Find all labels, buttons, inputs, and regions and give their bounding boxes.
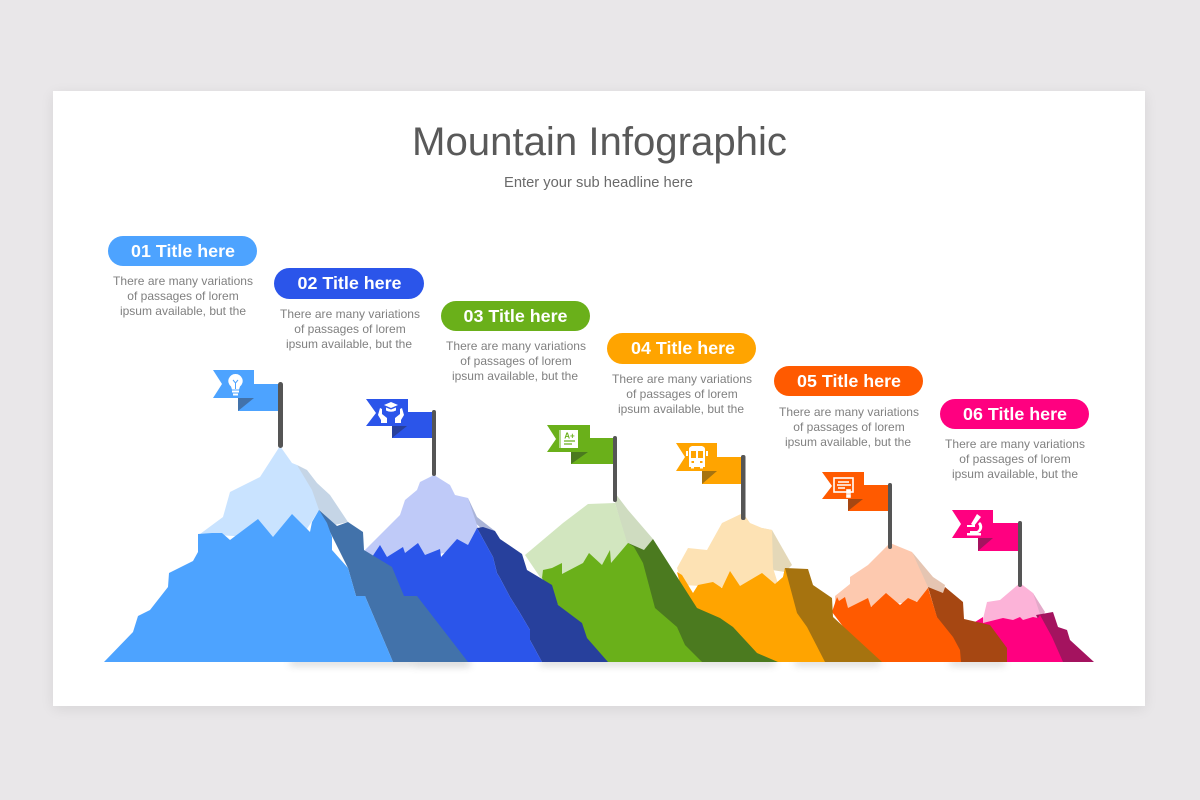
- step 4 label: of passages of lorem: [626, 387, 738, 401]
- step 3 label: ipsum available, but the: [452, 369, 578, 383]
- step 2 label: There are many variations: [280, 307, 420, 321]
- step 1 label: 01 Title here: [131, 241, 235, 261]
- step 1 label: There are many variations: [113, 274, 253, 288]
- mountain 6: pink: [950, 510, 1094, 662]
- icon: light bulb: [228, 374, 243, 396]
- step 1 label: [108, 236, 257, 318]
- title: Mountain Infographic: [412, 120, 787, 164]
- step 2 label: of passages of lorem: [294, 322, 406, 336]
- step 3 label: 03 Title here: [464, 306, 568, 326]
- step 6 label: There are many variations: [945, 437, 1085, 451]
- step 4 label: 04 Title here: [631, 338, 735, 358]
- step 5 label: There are many variations: [779, 405, 919, 419]
- step 1 label: ipsum available, but the: [120, 304, 246, 318]
- step 6 label: [940, 399, 1089, 481]
- flag 4 with icon: [676, 443, 746, 520]
- step 1 label: of passages of lorem: [127, 289, 239, 303]
- icon: certificate: [834, 478, 853, 497]
- slide card: [53, 91, 1145, 706]
- step 4 label: There are many variations: [612, 372, 752, 386]
- flag 2 with icon: [366, 399, 436, 476]
- step 6 label: 06 Title here: [963, 404, 1067, 424]
- flag 1 with icon: [213, 370, 283, 448]
- mountain 2: royal blue: [365, 399, 608, 662]
- icon: A+ document: A+: [564, 432, 575, 440]
- step 4 label: [607, 333, 756, 416]
- mountain 1: light blue: [104, 370, 468, 662]
- icon: hands holding graduation cap: [378, 402, 404, 423]
- icon: microscope: [967, 514, 982, 536]
- step 5 label: of passages of lorem: [793, 420, 905, 434]
- subtitle: Enter your sub headline here: [504, 175, 693, 191]
- icon: bus: [686, 446, 708, 468]
- step 5 label: ipsum available, but the: [785, 435, 911, 449]
- step 6 label: ipsum available, but the: [952, 467, 1078, 481]
- mountain 5: red-orange: [822, 472, 1007, 662]
- step 3 label: There are many variations: [446, 339, 586, 353]
- flag 3 with icon: [547, 425, 617, 502]
- step 6 label: of passages of lorem: [959, 452, 1071, 466]
- step 2 label: 02 Title here: [298, 273, 402, 293]
- step 3 label: of passages of lorem: [460, 354, 572, 368]
- step 5 label: [774, 366, 923, 449]
- step 2 label: [274, 268, 424, 351]
- step 2 label: ipsum available, but the: [286, 337, 412, 351]
- mountain 3: green: [525, 425, 778, 662]
- step 3 label: [441, 301, 590, 383]
- ground shadows: [290, 660, 1005, 666]
- flag 6 with icon: [952, 510, 1022, 587]
- mountain 4: orange: [676, 443, 882, 662]
- flag 5 with icon: [822, 472, 892, 549]
- step 5 label: 05 Title here: [797, 371, 901, 391]
- step 4 label: ipsum available, but the: [618, 402, 744, 416]
